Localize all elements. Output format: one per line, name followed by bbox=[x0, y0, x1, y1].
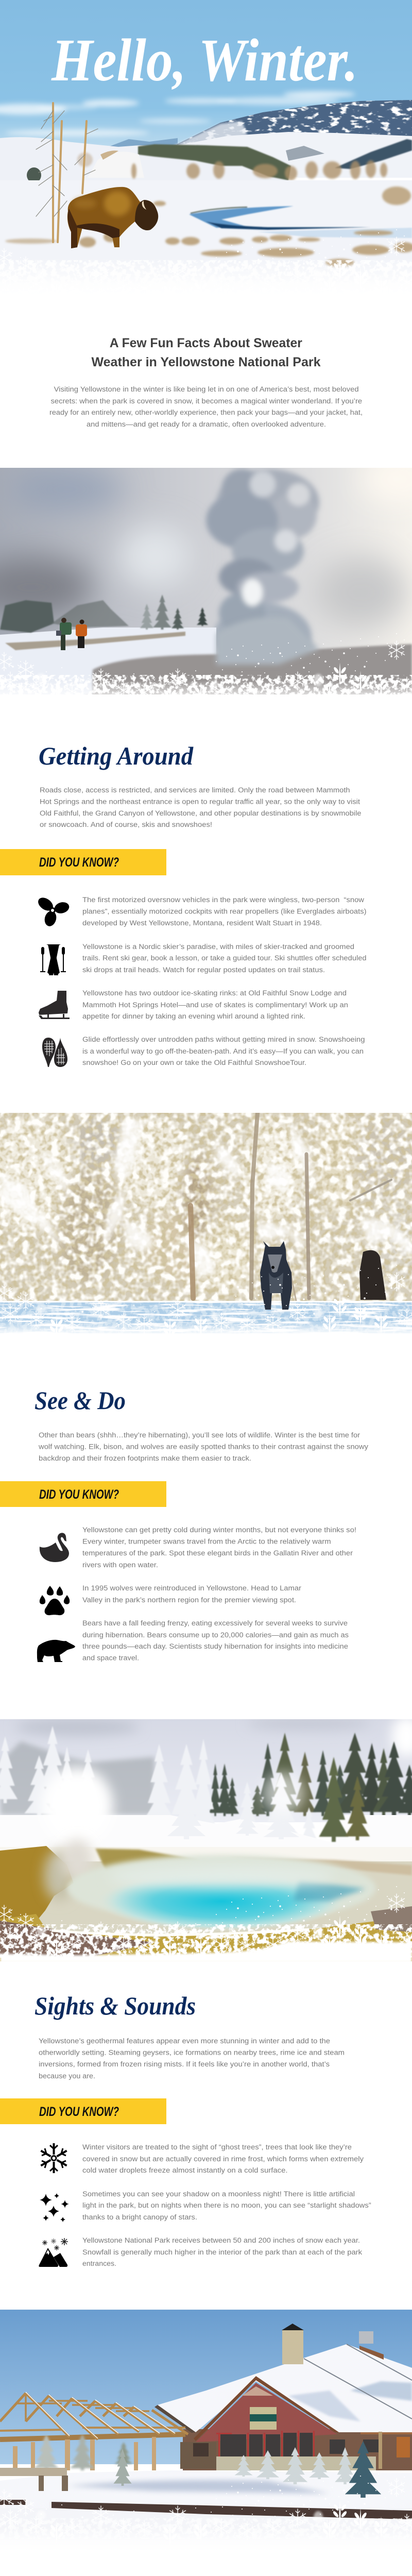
icon: ice skate bbox=[39, 991, 70, 1019]
text: ghost trees fact bbox=[82, 2143, 364, 2174]
text: bear fact: and space travel. bbox=[82, 1654, 139, 1662]
text: propeller fact: The first motorized oversnow vehicles in the park were wingless, two-person “snow bbox=[82, 896, 364, 904]
text: skiing fact: ski drops at trail heads. Watch for regular posted updates on trail status. bbox=[82, 966, 325, 974]
text: ghost trees fact: Winter visitors are treated to the sight of “ghost trees”, trees that look like they’re bbox=[82, 2143, 352, 2151]
text: swan fact: Every winter, trumpeter swans travel from the Arctic to the relatively warm bbox=[82, 1538, 331, 1546]
intro paragraph bbox=[49, 385, 363, 428]
paragraph: sights and sounds: otherworldly setting. Steaming geysers, ice formations on nearby trees, rime ice and steam bbox=[39, 2048, 345, 2057]
intro paragraph: and mittens—and get ready for a dramatic, often overlooked adventure. bbox=[87, 420, 326, 428]
text: propeller fact: planes”, essentially motorized cockpits with rear propellers (like Everglades airboats) bbox=[82, 908, 367, 915]
text: bear fact: three pounds—each day. Scientists study hibernation for insights into medicine bbox=[82, 1642, 348, 1650]
text: skating fact: appetite for dinner by taking an evening whirl around a lighted rink. bbox=[82, 1012, 305, 1020]
icon: snowshoes bbox=[42, 1038, 67, 1067]
geyser plume bbox=[206, 469, 319, 670]
icon: skis and poles bbox=[40, 944, 66, 975]
banner: did you know 1 bbox=[0, 849, 166, 875]
intro heading: A Few Fun Facts About Sweater bbox=[110, 336, 302, 350]
text: skiing fact: Yellowstone is a Nordic skier’s paradise, with miles of skier-tracked and groomed bbox=[82, 943, 354, 951]
text: swan fact: Yellowstone can get pretty cold during winter months, but not everyone thinks so! bbox=[82, 1526, 356, 1534]
panel: wolf in snowy forest photo bbox=[0, 1113, 412, 1340]
banner: did you know 3: DID YOU KNOW? bbox=[39, 2105, 119, 2119]
text: snowshoe fact: snowshoe! Go on your own or take the Old Faithful SnowshoeTour. bbox=[82, 1059, 306, 1066]
icon: snowy mountains bbox=[39, 2238, 68, 2267]
text: skiing fact bbox=[82, 943, 367, 974]
text: bear fact bbox=[82, 1619, 349, 1662]
intro paragraph: Visiting Yellowstone in the winter is like being let in on one of America’s best, most beloved bbox=[54, 385, 359, 393]
paragraph: getting around: Old Faithful, the Grand Canyon of Yellowstone, and other popular destinations is by snowmobile bbox=[40, 809, 362, 817]
text: starlight fact: thanks to a bright canopy of stars. bbox=[82, 2213, 197, 2221]
panel: thermal pool photo bbox=[0, 1716, 412, 1963]
banner: did you know 2 bbox=[0, 1481, 166, 1507]
icon: stars bbox=[40, 2193, 69, 2222]
text: propeller fact: developed by West Yellowstone, Montana, resident Walt Stuart in 1948. bbox=[82, 919, 322, 927]
intro heading: Weather in Yellowstone National Park bbox=[92, 355, 321, 369]
text: bear fact: during hibernation. Bears consume up to 20,000 calories—and gain as much as bbox=[82, 1631, 349, 1639]
snow-covered trees bbox=[0, 1726, 316, 1838]
snowy ground bbox=[0, 2470, 412, 2508]
background trees bbox=[0, 595, 208, 633]
paragraph: see and do: wolf watching. Elk, bison, and wolves are easily spotted thanks to their contrast against the snowy bbox=[38, 1443, 368, 1451]
paragraph: getting around bbox=[40, 786, 362, 828]
text: snowfall fact bbox=[82, 2236, 362, 2267]
section heading: Sights & Sounds: Sights & Sounds bbox=[35, 1991, 196, 2020]
hikers bbox=[56, 618, 87, 650]
timber pergola bbox=[0, 2392, 188, 2439]
text: swan fact: temperatures of the park. Spot these elegant birds in the Gallatin River and other bbox=[82, 1549, 353, 1557]
conifers, dark bbox=[209, 1733, 412, 1816]
text: ghost trees fact: covered in snow but are actually covered in rime frost, which forms when extremely bbox=[82, 2155, 364, 2163]
paragraph: see and do: Other than bears (shhh…they’re hibernating), you’ll see lots of wildlife. Winter is the best time for bbox=[39, 1431, 360, 1439]
text: skating fact: Mammoth Hot Springs Hotel—and use of skates is complimentary! Work up an bbox=[82, 1001, 348, 1009]
banner: did you know 3 bbox=[0, 2098, 166, 2124]
text: wolf fact bbox=[82, 1584, 302, 1604]
paragraph: getting around: Roads close, access is restricted, and services are limited. Only the road between Mammoth bbox=[40, 786, 350, 794]
icon: propeller bbox=[36, 895, 71, 927]
intro paragraph: ready for an entirely new, other-worldly experience, then pack your bags—and your jacket, hat, bbox=[49, 409, 363, 416]
panel: geyser photo bbox=[0, 468, 412, 694]
intro heading bbox=[92, 336, 321, 369]
intro paragraph: secrets: when the park is covered in snow, it becomes a magical winter wonderland. If you’re bbox=[50, 397, 362, 405]
panel: snow lodge photo bbox=[0, 2310, 412, 2552]
text: swan fact: rivers with open water. bbox=[82, 1561, 158, 1569]
turquoise pool bbox=[67, 1855, 376, 1931]
text: skating fact: Yellowstone has two outdoor ice-skating rinks: at Old Faithful Snow Lodge and bbox=[82, 989, 347, 997]
text: wolf fact: Valley in the park’s northern region for the premier viewing spot. bbox=[82, 1596, 296, 1604]
text: skiing fact: trails. Rent ski gear, book a lesson, or take a guided tour. Ski shuttles offer scheduled bbox=[82, 954, 367, 962]
paragraph: sights and sounds: because you are. bbox=[39, 2072, 95, 2080]
paragraph: getting around: or snowcoach. And of course, skis and snowshoes! bbox=[40, 821, 212, 828]
text: snowfall fact: Yellowstone National Park receives between 50 and 200 inches of snow each year. bbox=[82, 2236, 360, 2244]
banner: did you know 1: DID YOU KNOW? bbox=[39, 855, 119, 870]
text: snowfall fact: Snowfall is generally much higher in the interior of the park than at each of the park bbox=[82, 2248, 362, 2256]
young pine trees bbox=[113, 2441, 381, 2498]
text: wolf fact: In 1995 wolves were reintroduced in Yellowstone. Head to Lamar bbox=[82, 1584, 302, 1592]
section heading: Getting Around: Getting Around bbox=[39, 741, 194, 770]
bison bbox=[67, 187, 158, 248]
text: snowfall fact: entrances. bbox=[82, 2260, 116, 2267]
lodge building bbox=[154, 2324, 412, 2470]
icon: paw print bbox=[40, 1586, 70, 1615]
icon: swan bbox=[40, 1533, 69, 1562]
text: ghost trees fact: cold water droplets freeze almost instantly on a cold surface. bbox=[82, 2166, 287, 2174]
text: starlight fact bbox=[82, 2190, 371, 2221]
text: snowshoe fact: Glide effortlessly over untrodden paths without getting mired in snow. Snowshoeing bbox=[82, 1036, 365, 1043]
text: starlight fact: Sometimes you can see your shadow on a moonless night! There is little artificial bbox=[82, 2190, 355, 2198]
text: swan fact bbox=[82, 1526, 356, 1569]
text: propeller fact bbox=[82, 896, 367, 927]
icon: bear bbox=[37, 1640, 75, 1662]
title: Hello, Winter. bbox=[51, 26, 358, 94]
wolf bbox=[260, 1241, 292, 1310]
text: snowshoe fact: is a wonderful way to go off-the-beaten-path. And it’s easy—If you can walk, you can bbox=[82, 1047, 364, 1055]
paragraph: sights and sounds: Yellowstone’s geothermal features appear even more stunning in winter and add to the bbox=[39, 2037, 330, 2045]
text: snowshoe fact bbox=[82, 1036, 365, 1066]
paragraph: sights and sounds: inversions, formed from frozen rising mists. If it feels like you’re in another world, that’s bbox=[39, 2060, 330, 2068]
tree trunks bbox=[191, 1113, 391, 1301]
text: bear fact: Bears have a fall feeding frenzy, eating excessively for several weeks to survive bbox=[82, 1619, 348, 1627]
section heading: See & Do: See & Do bbox=[35, 1386, 126, 1415]
panel: hero photo of bison in snow bbox=[0, 0, 412, 270]
icon: snowflake bbox=[41, 2143, 67, 2173]
text: starlight fact: light in the park, but on nights when there is no moon, you can see “starlight shadows” bbox=[82, 2201, 371, 2209]
paragraph: getting around: Hot Springs and the northeast entrance is open to regular traffic all year, so the only way to visit bbox=[40, 798, 360, 806]
paragraph: sights and sounds bbox=[39, 2037, 345, 2080]
golden bacterial mats bbox=[0, 1839, 412, 1922]
paragraph: see and do bbox=[38, 1431, 368, 1462]
bare trees bbox=[36, 103, 98, 242]
text: skating fact bbox=[82, 989, 348, 1020]
banner: did you know 2: DID YOU KNOW? bbox=[39, 1487, 119, 1502]
paragraph: see and do: backdrop and their frozen footprints make them easier to track. bbox=[39, 1454, 251, 1462]
